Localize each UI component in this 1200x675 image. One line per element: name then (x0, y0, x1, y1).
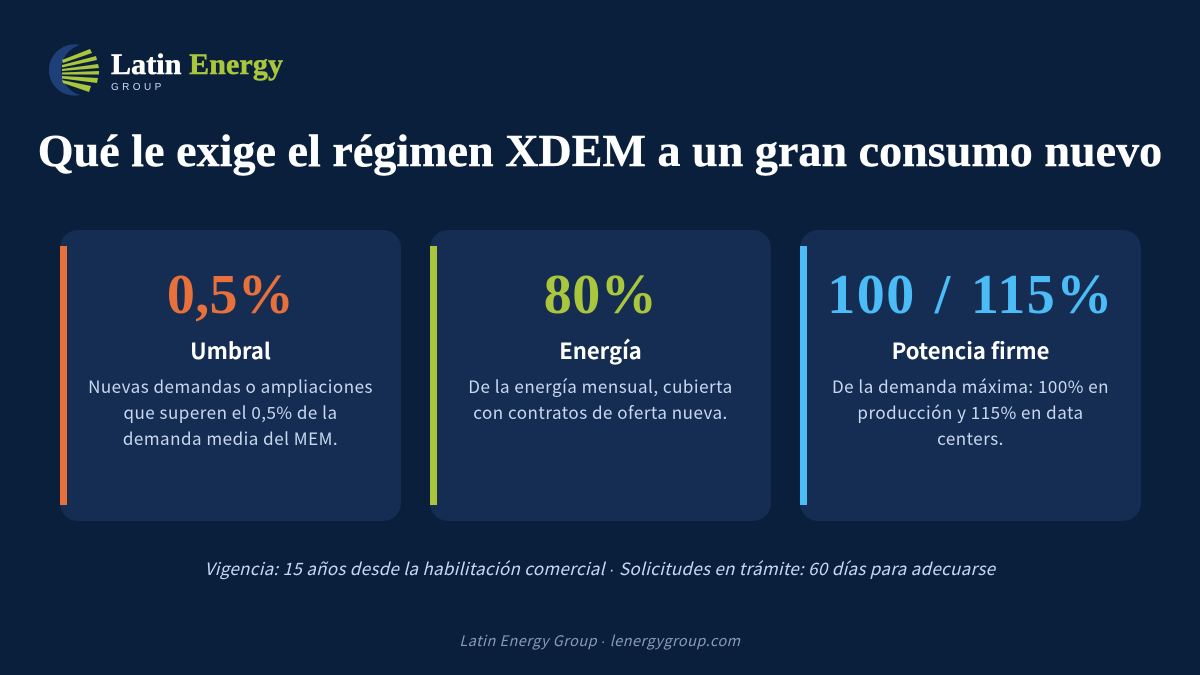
accent bar (800, 246, 807, 505)
logo subtitle: GROUP (111, 82, 165, 93)
stat: 80%: 80% (544, 264, 657, 326)
panel: potencia firme (800, 230, 1141, 521)
accent bar (430, 246, 437, 505)
title: Qué le exige el régimen XDEM a un gran consumo nuevo (38, 125, 1162, 176)
icon: sun rays logo mark (48, 44, 99, 96)
heading: energia: Energía (559, 334, 642, 366)
logo (48, 44, 283, 96)
heading: potencia firme: Potencia firme (892, 334, 1049, 366)
logo wordmark: Latin Energy (111, 48, 283, 81)
heading: umbral: Umbral (190, 334, 271, 366)
stat: 100 / 115%: 100 / 115% (827, 264, 1114, 326)
footer: Latin Energy Group · lenergygroup.com (459, 630, 741, 651)
stat: 0,5%: 0,5% (167, 264, 294, 326)
description: Nuevas demandas o ampliaciones que superen el 0,5% de la demanda media del MEM. (88, 373, 373, 450)
panel: energia (430, 230, 771, 521)
description: De la demanda máxima: 100% en producción y 115% en data centers. (832, 373, 1109, 450)
note: Vigencia: 15 años desde la habilitación comercial · Solicitudes en trámite: 60 días para adecuarse (205, 555, 995, 580)
description: De la energía mensual, cubierta con contratos de oferta nueva. (468, 373, 733, 424)
accent bar (60, 246, 67, 505)
panel: umbral (60, 230, 401, 521)
